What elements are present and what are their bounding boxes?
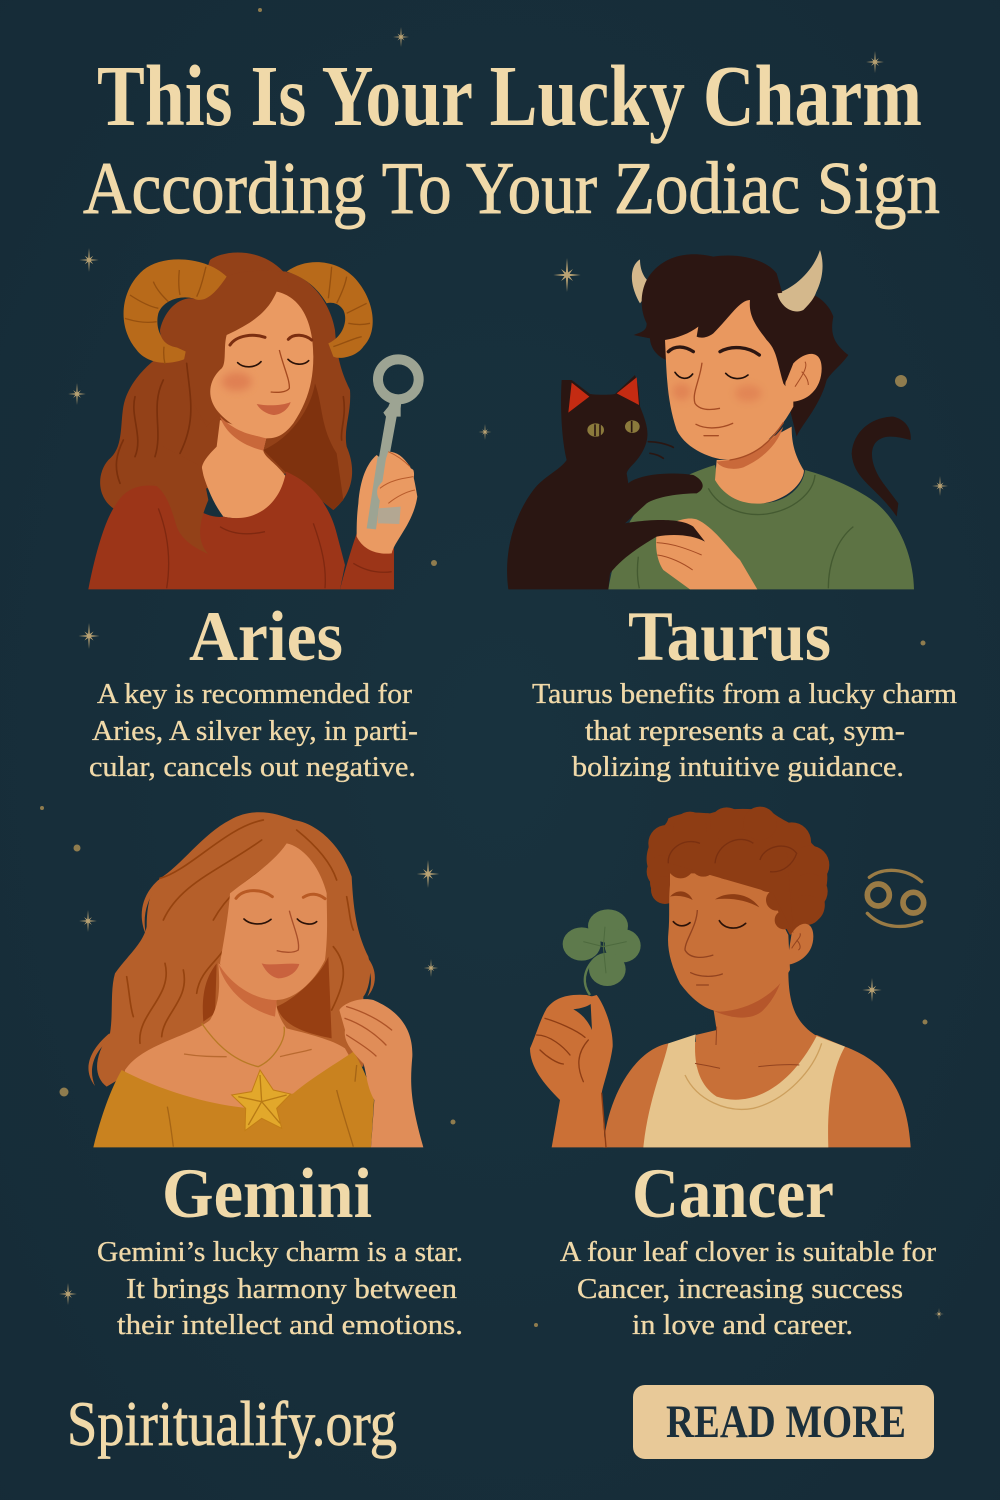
Aries description: cular, cancels out negative.	[89, 751, 416, 783]
ear and face	[667, 839, 813, 1012]
silver key	[367, 359, 419, 529]
cancer zodiac symbol	[867, 870, 924, 926]
illustration: Taurus man with bull horns and a black cat	[507, 250, 914, 589]
title: According To Your Zodiac Sign	[83, 148, 940, 230]
hand	[357, 452, 417, 554]
face	[220, 843, 327, 1000]
title	[83, 47, 940, 230]
Aries description: Aries, A silver key, in parti-	[92, 715, 418, 747]
neck and chest	[125, 963, 353, 1120]
illustration: Gemini woman with star necklace	[88, 812, 423, 1147]
Aries description	[89, 678, 418, 783]
Cancer description: A four leaf clover is suitable for	[560, 1236, 936, 1268]
neck	[696, 970, 817, 1067]
tank top	[643, 1034, 845, 1147]
read more button	[633, 1385, 934, 1459]
shoulders	[603, 1035, 911, 1147]
footer brand: Spiritualify.org	[67, 1389, 397, 1459]
illustration: Cancer man holding a four leaf clover	[530, 807, 924, 1147]
hair	[633, 254, 848, 437]
Taurus description	[532, 678, 957, 783]
face and neck	[202, 292, 313, 518]
Cancer description	[560, 1236, 936, 1341]
Taurus description: bolizing intuitive guidance.	[572, 751, 904, 783]
read more button: READ MORE	[666, 1396, 906, 1448]
Gemini description: Gemini’s lucky charm is a star.	[97, 1236, 463, 1268]
Cancer description: Cancer, increasing success	[577, 1273, 903, 1305]
shirt	[608, 465, 914, 589]
hand and arm	[530, 995, 613, 1147]
blouse	[93, 1052, 374, 1147]
Aries heading: Aries	[189, 598, 343, 676]
Aries description: A key is recommended for	[97, 678, 412, 710]
Gemini description: their intellect and emotions.	[117, 1309, 463, 1341]
sweater	[88, 472, 345, 589]
Taurus description: Taurus benefits from a lucky charm	[532, 678, 957, 710]
neck	[715, 427, 804, 504]
Gemini description: It brings harmony between	[126, 1273, 458, 1305]
illustration: Aries woman with ram horns holding a silver key	[88, 253, 419, 589]
Cancer heading: Cancer	[632, 1155, 834, 1233]
hair	[97, 812, 370, 1087]
horns	[632, 250, 823, 311]
cat tail	[852, 417, 911, 517]
hair	[647, 807, 829, 935]
Gemini description	[97, 1236, 463, 1341]
Taurus description: that represents a cat, sym-	[585, 715, 905, 747]
hand and arm	[339, 999, 423, 1147]
star necklace	[184, 1023, 312, 1131]
background stars and dots	[40, 8, 948, 1327]
Gemini heading: Gemini	[162, 1155, 372, 1233]
Cancer description: in love and career.	[632, 1309, 853, 1341]
hand	[656, 518, 757, 589]
Taurus heading: Taurus	[628, 598, 831, 676]
four leaf clover	[563, 909, 641, 995]
ear and face	[665, 300, 822, 460]
black cat	[507, 375, 705, 589]
